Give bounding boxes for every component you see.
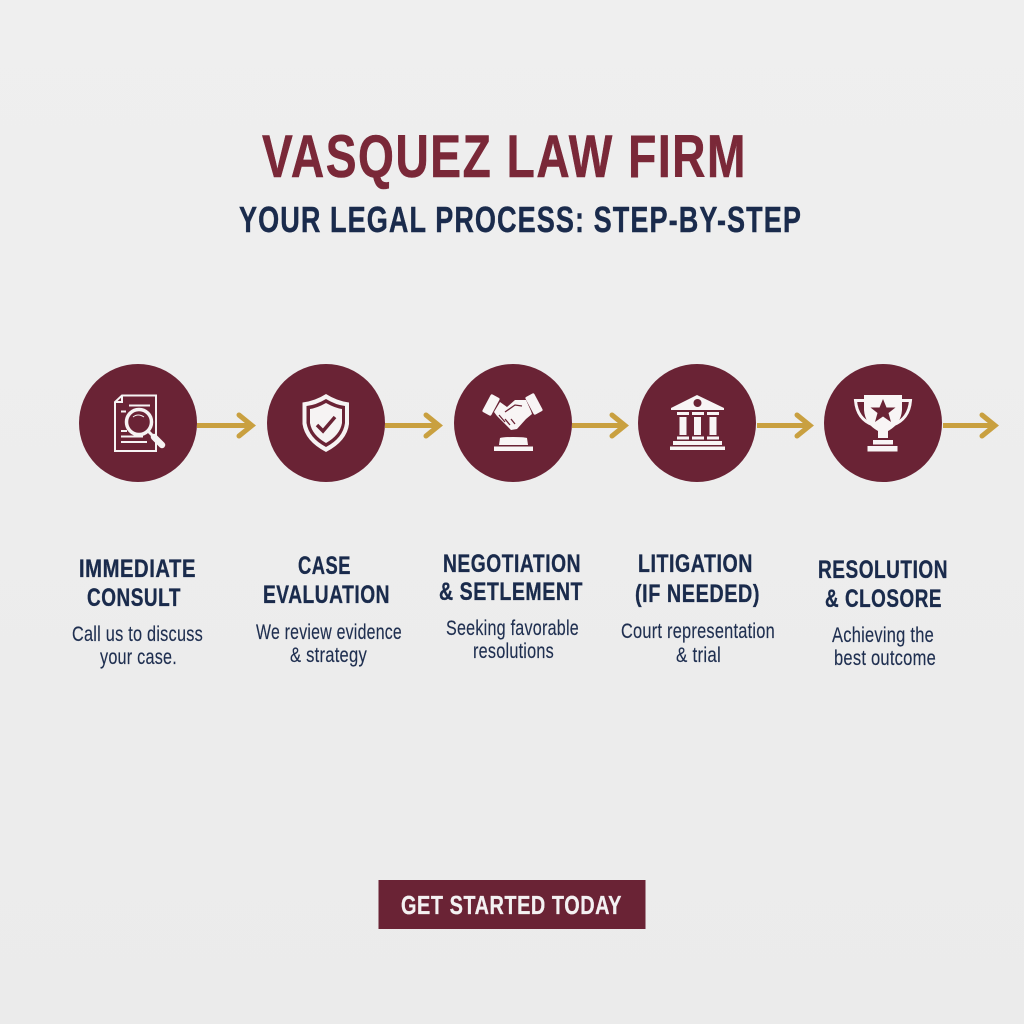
call to action button (378, 880, 646, 929)
arrow 5 (943, 415, 995, 436)
step 1 text (72, 555, 203, 669)
step 2 text: & strategy (290, 644, 367, 667)
step 4 text: & trial (676, 644, 721, 667)
step 4 text (621, 550, 775, 667)
arrow 4 (757, 415, 810, 436)
step 2 text: CASE (298, 552, 351, 580)
step 5 text: & CLOSORE (825, 585, 942, 613)
icon: shield with check (302, 394, 349, 452)
step 3 circle with handshake icon (454, 364, 572, 482)
arrow 2 (385, 415, 439, 436)
step 3 text: Seeking favorable (446, 617, 579, 640)
icon: trophy with star (856, 395, 910, 452)
step 4 text: (IF NEEDED) (635, 580, 760, 608)
step 2 text: EVALUATION (263, 581, 390, 609)
icon: courthouse (670, 395, 725, 450)
step 1 text: your case. (100, 646, 177, 669)
arrow 1 (197, 415, 252, 436)
step 4 text: Court representation (621, 620, 775, 643)
step 3 text: resolutions (473, 640, 554, 663)
step 2 text: We review evidence (256, 621, 402, 644)
step 4 circle with courthouse icon (638, 364, 756, 482)
step 1 text: Call us to discuss (72, 623, 203, 646)
step 1 circle with document search icon (79, 364, 197, 482)
step 5 circle with trophy icon (824, 364, 942, 482)
step 2 circle with shield icon (267, 364, 385, 482)
step 4 text: LITIGATION (638, 550, 753, 578)
step 3 text: NEGOTIATION (443, 550, 581, 578)
step 3 text (439, 550, 583, 663)
step 3 text: & SETLEMENT (439, 578, 583, 606)
step 5 text: Achieving the (832, 624, 934, 647)
step 1 text: CONSULT (87, 584, 181, 612)
step 1 text: IMMEDIATE (79, 555, 196, 583)
step 5 text: RESOLUTION (818, 556, 948, 584)
call to action button: GET STARTED TODAY (401, 890, 622, 920)
title: VASQUEZ LAW FIRM (262, 123, 747, 190)
step 2 text (256, 552, 402, 667)
step 5 text: best outcome (834, 647, 936, 670)
icon: handshake on base (482, 393, 543, 451)
icon: document with magnifier (115, 396, 162, 451)
step 5 text (818, 556, 948, 670)
subtitle: YOUR LEGAL PROCESS: STEP-BY-STEP (239, 199, 802, 240)
arrow 3 (572, 415, 625, 436)
